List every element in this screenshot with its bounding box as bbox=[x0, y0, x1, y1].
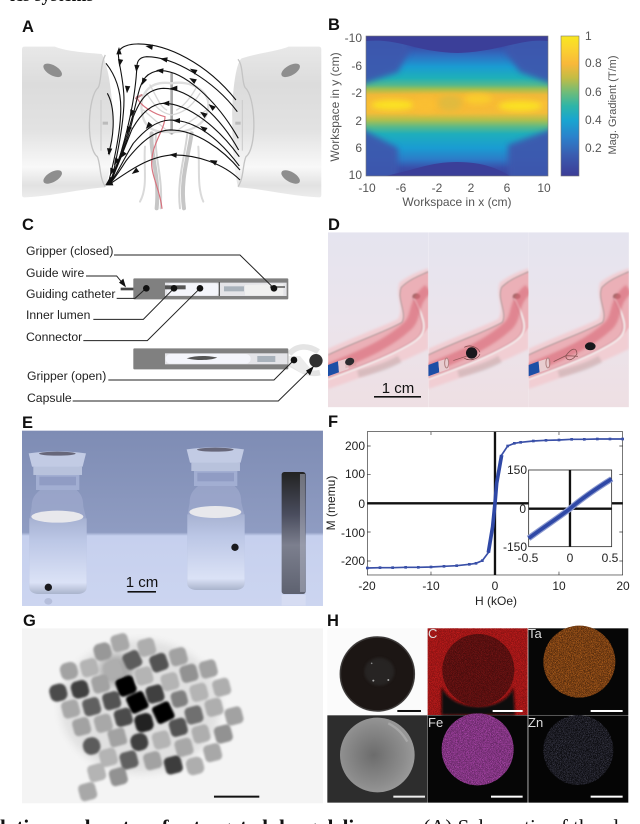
nanocubes bbox=[48, 632, 245, 802]
E scale bar: 1 cm bbox=[126, 574, 158, 591]
D scale bar: 1 cm bbox=[382, 380, 414, 397]
panel G: nanocube micrograph bbox=[22, 612, 323, 803]
label F: F bbox=[328, 413, 338, 431]
field lines bbox=[106, 44, 240, 184]
C text labels: Capsule bbox=[27, 391, 72, 405]
panel C: catheter gripper schematic bbox=[22, 216, 323, 405]
F tick labels: 100 bbox=[345, 467, 365, 481]
B tick labels: 10 bbox=[349, 168, 362, 182]
B tick labels: 10 bbox=[537, 181, 551, 195]
left magnet bbox=[22, 47, 113, 197]
F tick labels: -150 bbox=[503, 540, 527, 554]
label E: E bbox=[22, 414, 33, 432]
F tick labels: 0 bbox=[492, 579, 499, 593]
B tick labels: 6 bbox=[504, 181, 511, 195]
panel D: photo sequence bbox=[328, 216, 629, 407]
B axis titles bbox=[328, 52, 619, 209]
B tick labels: 2 bbox=[355, 114, 362, 128]
label G: G bbox=[23, 612, 36, 630]
tantalum tile bbox=[528, 626, 628, 715]
F tick labels: 0 bbox=[567, 551, 574, 565]
brain vasculature bbox=[136, 74, 208, 208]
C text labels: Gripper (closed) bbox=[26, 244, 113, 258]
frame 3 bbox=[529, 232, 629, 407]
F tick labels: 0.5 bbox=[602, 551, 619, 565]
element labels: Fe bbox=[428, 715, 443, 730]
F tick labels: 10 bbox=[552, 579, 566, 593]
F tick labels: 0 bbox=[358, 497, 365, 511]
B tick labels: 1 bbox=[585, 29, 592, 43]
field arrowheads bbox=[104, 43, 217, 188]
leader lines and dots bbox=[73, 255, 312, 401]
C text labels: Gripper (open) bbox=[27, 369, 106, 383]
vial 1 bbox=[29, 451, 87, 605]
D scale bar bbox=[374, 380, 421, 398]
element labels: Zn bbox=[528, 715, 543, 730]
F axis titles bbox=[324, 476, 517, 608]
panel H: elemental maps bbox=[327, 612, 628, 803]
frame 1 bbox=[328, 232, 428, 407]
label B: B bbox=[328, 16, 340, 34]
B axis titles: Mag. Gradient (T/m) bbox=[607, 55, 619, 155]
label H: H bbox=[327, 612, 339, 630]
colorbar bbox=[561, 36, 579, 176]
F axis titles: M (memu) bbox=[324, 476, 338, 530]
heatmap bbox=[366, 36, 548, 176]
F tick labels: -0.5 bbox=[518, 551, 539, 565]
B tick labels: 6 bbox=[355, 141, 362, 155]
F axis titles: H (kOe) bbox=[475, 594, 517, 608]
F tick labels: 150 bbox=[507, 463, 527, 477]
catheter drawings bbox=[73, 255, 323, 401]
F tick labels: 200 bbox=[345, 439, 365, 453]
C text labels: Guide wire bbox=[26, 266, 84, 280]
B axis titles: Workspace in y (cm) bbox=[328, 52, 342, 162]
panel B: gradient heatmap bbox=[328, 16, 619, 209]
B tick labels: -10 bbox=[345, 31, 362, 45]
F tick labels: 20 bbox=[616, 579, 630, 593]
map tiles bbox=[327, 626, 628, 803]
open gripper tube bbox=[133, 347, 323, 373]
main plot bbox=[366, 432, 624, 575]
iron tile bbox=[428, 713, 528, 803]
label A: A bbox=[22, 18, 34, 36]
B tick labels: 0.8 bbox=[585, 56, 602, 70]
bar magnet bbox=[282, 472, 306, 606]
B tick labels: 0.2 bbox=[585, 141, 602, 155]
F tick labels bbox=[341, 439, 630, 593]
B tick labels: -6 bbox=[351, 59, 362, 73]
B tick labels: -2 bbox=[351, 86, 362, 100]
B tick labels bbox=[345, 29, 602, 195]
B tick labels: 0.4 bbox=[585, 113, 602, 127]
C text labels: Inner lumen bbox=[26, 308, 90, 322]
TEM tile bbox=[327, 628, 427, 715]
F tick labels: -100 bbox=[341, 526, 365, 540]
frame 2 bbox=[428, 232, 529, 407]
F tick labels: -20 bbox=[358, 579, 376, 593]
label D: D bbox=[328, 216, 340, 234]
vial 2 bbox=[187, 447, 245, 590]
micrograph bbox=[22, 628, 323, 803]
panel A: magnets and field lines bbox=[22, 18, 321, 208]
B tick labels: -10 bbox=[358, 181, 376, 195]
panel E: vials photo bbox=[22, 414, 323, 606]
B tick labels: -6 bbox=[396, 181, 407, 195]
G scale bar bbox=[214, 796, 259, 798]
B tick labels: 0.6 bbox=[585, 85, 602, 99]
B tick labels: 2 bbox=[468, 181, 475, 195]
photo bbox=[22, 431, 323, 606]
carbon tile bbox=[428, 628, 528, 715]
inset plot bbox=[529, 470, 612, 547]
panel F: hysteresis chart bbox=[324, 413, 630, 608]
zinc tile bbox=[528, 715, 628, 803]
element labels: C bbox=[428, 626, 437, 641]
F tick labels: -10 bbox=[422, 579, 440, 593]
SEM tile bbox=[327, 715, 427, 803]
curve markers bbox=[366, 438, 624, 569]
M-H curve bbox=[367, 439, 623, 568]
F tick labels: 0 bbox=[519, 502, 526, 516]
F tick labels: -200 bbox=[341, 554, 365, 568]
B axis titles: Workspace in x (cm) bbox=[402, 195, 512, 209]
C text labels bbox=[26, 244, 115, 405]
C text labels: Guiding catheter bbox=[26, 287, 115, 301]
right magnet bbox=[232, 47, 321, 197]
field schematic bbox=[22, 43, 321, 208]
B tick labels: -2 bbox=[432, 181, 443, 195]
element labels: Ta bbox=[528, 626, 542, 641]
element labels bbox=[428, 626, 543, 730]
closed gripper tube bbox=[121, 278, 288, 299]
C text labels: Connector bbox=[26, 330, 82, 344]
label C: C bbox=[22, 216, 34, 234]
